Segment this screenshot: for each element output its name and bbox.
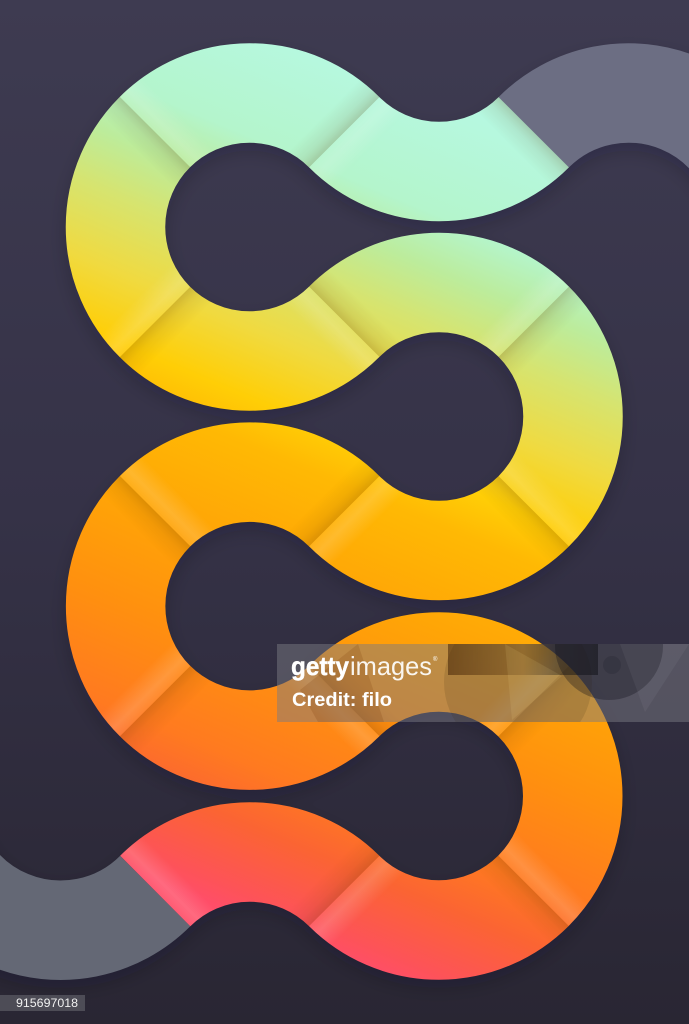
grey ribbon tail: bottom left bbox=[0, 796, 155, 930]
watermark logo: getty bbox=[291, 651, 349, 681]
image id label: 915697018 bbox=[16, 996, 78, 1010]
watermark credit: Credit: filo bbox=[292, 690, 392, 711]
image id label bbox=[0, 995, 85, 1011]
watermark band bbox=[277, 644, 689, 722]
ribbon fold shading bbox=[96, 73, 593, 950]
watermark logo bbox=[291, 651, 438, 681]
grey ribbon tail: top right bbox=[534, 93, 689, 227]
coloured gradient ribbon bbox=[115, 93, 573, 930]
watermark logo: ® bbox=[433, 656, 438, 663]
watermark logo: images bbox=[350, 651, 432, 681]
